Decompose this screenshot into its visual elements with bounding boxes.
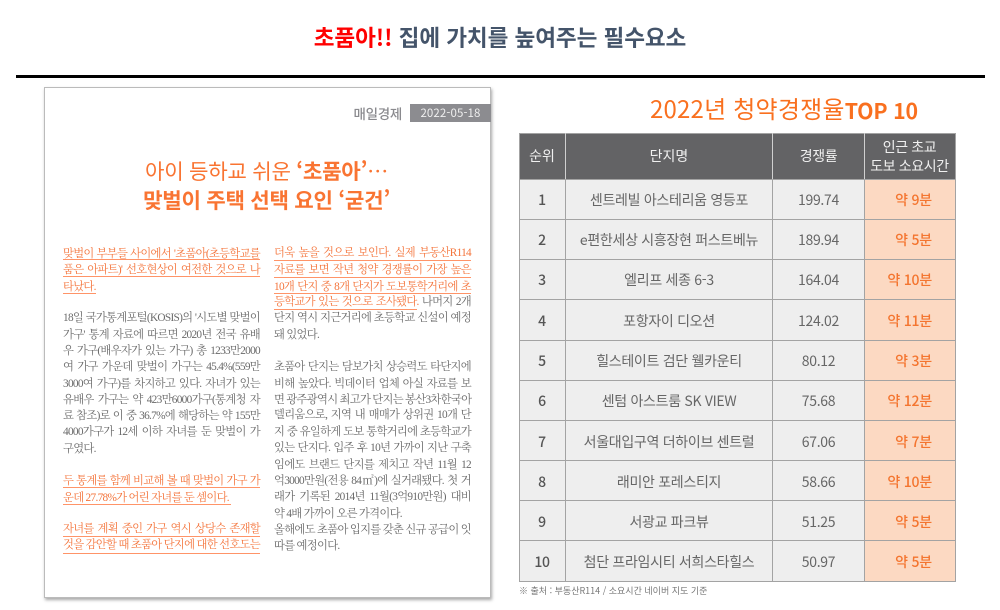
row 5: 힐스테이트 검단 웰카운티 xyxy=(596,351,742,371)
article column 2: 임에도 브랜드 단지를 제치고 작년 11월 12 xyxy=(274,459,471,471)
article headline: 아이 등하교 쉬운 ‘초품아’… xyxy=(145,155,388,186)
article column 1 xyxy=(63,247,261,554)
table header xyxy=(529,137,949,176)
article column 2: 돼 있었다. xyxy=(274,329,319,341)
article column 2: 면 광주광역시 최고가 단지는 봉산3차한국아 xyxy=(274,394,471,406)
article column 1: 자녀를 계획 중인 가구 역시 상당수 존재할 xyxy=(63,523,260,535)
article column 1: 것을 감안할 때 초품아 단지에 대한 선호도는 xyxy=(63,539,260,551)
row 4: 약 11분 xyxy=(887,311,932,331)
date tag xyxy=(410,104,491,122)
row 6: 센텀 아스트룸 SK VIEW xyxy=(602,391,736,411)
row 1: 199.74 xyxy=(798,190,839,210)
row 5 xyxy=(538,351,932,371)
row 3: 약 10분 xyxy=(887,270,932,290)
row 6: 6 xyxy=(538,391,546,411)
article column 1: 타났다. xyxy=(63,281,96,293)
row 7: 7 xyxy=(538,432,546,452)
article column 1: 4000가구가 12세 이하 자녀를 둔 맞벌이 가 xyxy=(63,426,260,438)
row 1 xyxy=(538,190,932,210)
row 7: 67.06 xyxy=(802,432,835,452)
row 8: 래미안 포레스티지 xyxy=(617,472,721,492)
article column 1: 구였다. xyxy=(63,443,96,455)
table body and column backgrounds xyxy=(519,133,956,582)
row 4: 4 xyxy=(538,311,546,331)
row 1: 센트레빌 아스테리움 영등포 xyxy=(590,190,748,210)
row 9: 서광교 파크뷰 xyxy=(629,512,709,532)
row 4 xyxy=(538,311,932,331)
article column 2 xyxy=(274,246,472,552)
article column 1: 우 가구(배우자가 있는 가구) 총 1233만2000 xyxy=(63,345,260,357)
row 8 xyxy=(538,472,932,492)
row 5: 5 xyxy=(538,351,546,371)
row 3: 164.04 xyxy=(798,270,839,290)
table header: 도보 소요시간 xyxy=(870,156,949,176)
row 2: 2 xyxy=(538,230,546,250)
row 1: 1 xyxy=(538,190,546,210)
row 8: 58.66 xyxy=(802,472,835,492)
row 4: 포항자이 디오션 xyxy=(623,311,715,331)
row 7: 서울대입구역 더하이브 센트럴 xyxy=(584,432,754,452)
article column 2: 더욱 높을 것으로 보인다. 실제 부동산R114 xyxy=(274,247,471,259)
row 6 xyxy=(538,391,932,411)
ranking table xyxy=(519,133,956,582)
article column 1: 품은 아파트)' 선호현상이 여전한 것으로 나 xyxy=(63,264,260,276)
table header: 인근 초교 xyxy=(883,137,936,157)
article column 2: 있는 단지다. 입주 후 10년 가까이 지난 구축 xyxy=(274,442,471,454)
article column 1: 두 통계를 함께 비교해 볼 때 맞벌이 가구 가 xyxy=(63,475,260,487)
article headline: 맞벌이 주택 선택 요인 ‘굳건’ xyxy=(143,184,390,215)
article column 1: 유배우 가구는 약 423만6000가구(통계청 자 xyxy=(63,394,260,406)
article column 2: 따를 예정이다. xyxy=(274,540,340,552)
row 7 xyxy=(538,432,932,452)
article column 1: 3000여 가구)를 차지하고 있다. 자녀가 있는 xyxy=(63,378,260,390)
newspaper name: 매일경제 xyxy=(354,103,402,123)
row 2: e편한세상 시흥장현 퍼스트베뉴 xyxy=(580,230,758,250)
article column 2: 단지 역시 지근거리에 초등학교 신설이 예정 xyxy=(274,312,471,324)
row 4: 124.02 xyxy=(798,311,839,331)
article column 1: 18일 국가통계포털(KOSIS)의 '시도별 맞벌이 xyxy=(63,312,260,324)
row 2 xyxy=(538,230,932,250)
row 6: 75.68 xyxy=(802,391,835,411)
article column 1: 운데 27.78%가 어린 자녀를 둔 셈이다. xyxy=(63,492,229,504)
row 1: 약 9분 xyxy=(895,190,932,210)
article column 2: 억3000만원(전용 84㎡)에 실거래됐다. 첫 거 xyxy=(274,475,471,487)
article column 2: 델리움으로, 지역 내 매매가 상위권 10개 단 xyxy=(274,409,471,421)
article column 2: 초품아 단지는 담보가치 상승력도 타단지에 xyxy=(274,361,471,373)
row 5: 80.12 xyxy=(802,351,835,371)
article column 1: 여 가구 가운데 맞벌이 가구는 45.4%(559만 xyxy=(63,361,260,373)
article column 2: 등학교가 있는 것으로 조사됐다. 나머지 2개 xyxy=(274,296,471,308)
row 5: 약 3분 xyxy=(895,351,932,371)
article column 1: 료 참조)로 이 중 36.7%에 해당하는 약 155만 xyxy=(63,410,260,422)
row 10: 첨단 프라임시티 서희스타힐스 xyxy=(584,552,754,572)
article column 2: 래가 기록된 2014년 11월(3억910만원) 대비 xyxy=(274,491,471,503)
article column 1: 가구' 통계 자료에 따르면 2020년 전국 유배 xyxy=(63,329,260,341)
row 10: 약 5분 xyxy=(895,552,932,572)
article column 2: 비해 높았다. 빅데이터 업체 아실 자료를 보 xyxy=(274,378,471,390)
row 7: 약 7분 xyxy=(895,432,932,452)
row 9 xyxy=(538,512,932,532)
article column 2: 자료를 보면 작년 청약 경쟁률이 가장 높은 xyxy=(274,264,471,276)
table header: 순위 xyxy=(529,146,555,166)
date tag: 2022-05-18 xyxy=(420,105,481,121)
article column 2: 10개 단지 중 8개 단지가 도보통학거리에 초 xyxy=(274,281,471,293)
row 9: 약 5분 xyxy=(895,512,932,532)
row 8: 8 xyxy=(538,472,546,492)
source note: ※ 출처 : 부동산R114 / 소요시간 네이버 지도 기준 xyxy=(519,584,707,597)
row 3: 엘리프 세종 6-3 xyxy=(624,270,714,290)
row 9: 9 xyxy=(538,512,546,532)
article column 2: 약 4배 가까이 오른 가격이다. xyxy=(274,508,402,520)
article column 2: 지 중 유일하게 도보 통학거리에 초등학교가 xyxy=(274,426,471,438)
article column 1: 맞벌이 부부들 사이에서 '초품아(초등학교를 xyxy=(63,248,260,260)
table heading: 2022년 청약경쟁율TOP 10 xyxy=(650,90,918,126)
row 9: 51.25 xyxy=(802,512,835,532)
row 2: 약 5분 xyxy=(895,230,932,250)
row 10: 50.97 xyxy=(802,552,835,572)
row 8: 약 10분 xyxy=(887,472,932,492)
row 6: 약 12분 xyxy=(887,391,932,411)
article headline xyxy=(143,155,390,215)
article column 2: 올해에도 초품아 입지를 갖춘 신규 공급이 잇 xyxy=(274,524,471,536)
row 2: 189.94 xyxy=(798,230,839,250)
row 3: 3 xyxy=(538,270,546,290)
row 10: 10 xyxy=(534,552,550,572)
row 10 xyxy=(534,552,932,572)
panel: news article xyxy=(44,87,491,598)
title: 초품아!! 집에 가치를 높여주는 필수요소 xyxy=(314,20,686,53)
table header: 단지명 xyxy=(650,146,688,166)
row 3 xyxy=(538,270,932,290)
table header: 경쟁률 xyxy=(800,146,837,166)
